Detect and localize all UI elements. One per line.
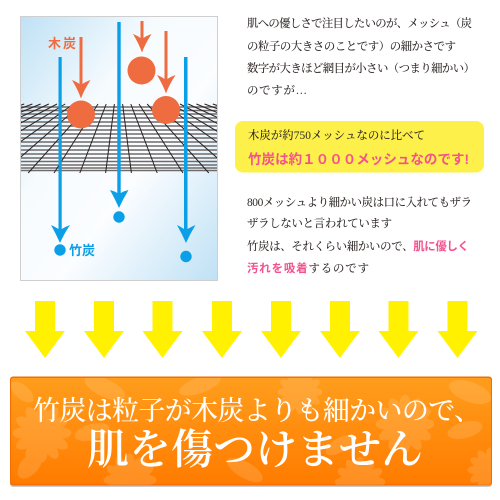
- callout: mesh comparison: 木炭が約750メッシュなのに比べて: [248, 128, 425, 142]
- text block: intro: 数字が大きほど網目が小さい（つまり細かい）: [247, 61, 475, 75]
- text block: details: ザラしないと言われています: [247, 217, 392, 230]
- text block: details: 竹炭は、それくらい細かいので、肌に優しく: [247, 239, 469, 253]
- text block: intro: [247, 16, 475, 97]
- text block: details: [247, 195, 472, 275]
- callout: mesh comparison: [235, 121, 484, 172]
- text block: intro: のですが…: [247, 84, 307, 97]
- label: charcoal: 木炭: [48, 36, 76, 51]
- label: bamboo charcoal: 竹炭: [69, 243, 95, 258]
- arrows: yellow down arrows: [25, 301, 478, 358]
- heading: banner line 1: 竹炭は粒子が木炭よりも細かいので、: [33, 396, 481, 426]
- heading: banner line 2: 肌を傷つけません: [87, 428, 423, 474]
- bamboo charcoal particles and arrows: [51, 22, 196, 262]
- callout: mesh comparison: 竹炭は約１０００メッシュなのです!: [248, 151, 469, 167]
- banner: conclusion: [10, 376, 492, 487]
- mesh grid: [21, 104, 217, 174]
- text block: intro: 肌への優しさで注目したいのが、メッシュ（炭: [247, 16, 472, 30]
- text block: details: 汚れを吸着するのです: [247, 261, 369, 275]
- text block: details: 800メッシュより細かい炭は口に入れてもザラ: [247, 195, 472, 209]
- charcoal particles and arrows: [67, 21, 180, 128]
- panel: mesh diagram: [20, 16, 218, 281]
- text block: intro: の粒子の大きさのことです）の細かさです: [247, 39, 456, 53]
